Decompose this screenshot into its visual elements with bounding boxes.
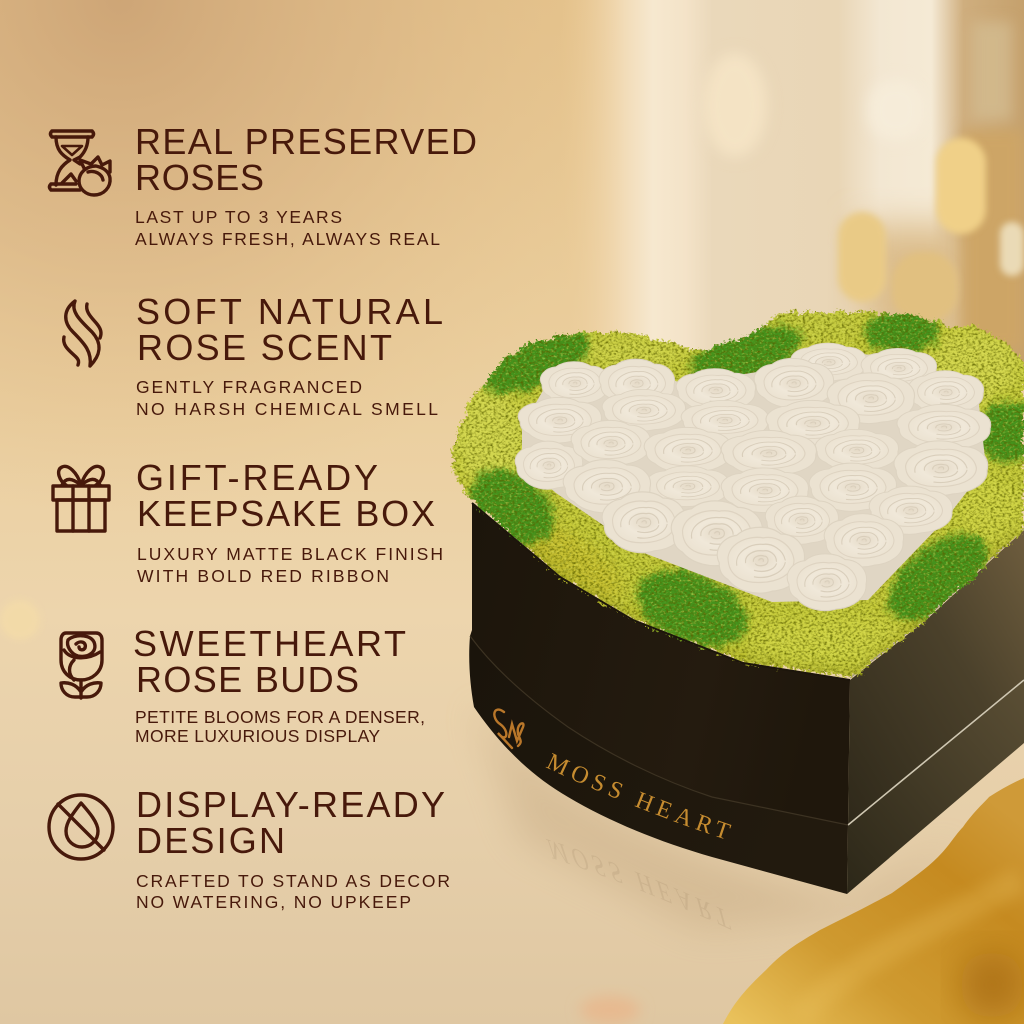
heading: SOFT NATURAL [136, 291, 443, 332]
feature: display-ready design [49, 784, 450, 912]
icon: scent wisps [64, 301, 101, 366]
feature: gift-ready keepsake box [53, 457, 443, 586]
box upper left face [470, 503, 850, 825]
description: LAST UP TO 3 YEARS [135, 207, 342, 227]
gold silk fabric [723, 778, 1024, 1024]
icon: no water drop [49, 795, 113, 859]
description [136, 871, 450, 912]
icon: rose bud [61, 633, 102, 698]
heading: DESIGN [136, 820, 285, 861]
description: LUXURY MATTE BLACK FINISH [137, 544, 443, 564]
description: WITH BOLD RED RIBBON [137, 566, 389, 586]
heading: ROSE SCENT [137, 327, 392, 368]
description [135, 207, 440, 249]
description: MORE LUXURIOUS DISPLAY [135, 726, 380, 746]
heading: DISPLAY-READY [136, 784, 445, 825]
description: CRAFTED TO STAND AS DECOR [136, 871, 450, 891]
heading: SWEETHEART [133, 623, 406, 664]
heart-shaped black box: MOSS HEART [546, 753, 732, 839]
feature: real preserved roses [50, 121, 477, 249]
feature: sweetheart rose buds [61, 623, 425, 746]
description: ALWAYS FRESH, ALWAYS REAL [135, 229, 440, 249]
icon: hourglass with rose [50, 131, 110, 195]
heading [136, 291, 443, 368]
box upper right face [848, 530, 1024, 825]
heading [136, 457, 435, 534]
heading [133, 623, 406, 700]
heading: ROSES [135, 157, 264, 198]
green moss patches [455, 311, 1024, 661]
brand monogram [494, 710, 523, 748]
brand name on lid [545, 767, 742, 845]
icon: gift box [53, 466, 109, 531]
heading: GIFT-READY [136, 457, 378, 498]
description: PETITE BLOOMS FOR A DENSER, [135, 707, 425, 727]
box lid left face [469, 636, 848, 894]
heading [135, 121, 477, 198]
moss ring [440, 300, 1024, 690]
description [136, 377, 438, 419]
heading: KEEPSAKE BOX [137, 493, 435, 534]
box reflection on table: MOSS HEART [546, 839, 731, 930]
white preserved roses heart [510, 340, 1000, 620]
heading [136, 784, 445, 861]
description [135, 707, 425, 746]
box lid right face [847, 680, 1024, 894]
heart-shaped black box [469, 504, 1024, 894]
description: GENTLY FRAGRANCED [136, 377, 362, 397]
heading: ROSE BUDS [136, 659, 359, 700]
description [137, 544, 443, 586]
feature: soft natural rose scent [64, 291, 443, 419]
description: NO HARSH CHEMICAL SMELL [136, 399, 438, 419]
description: NO WATERING, NO UPKEEP [136, 892, 411, 912]
heading: REAL PRESERVED [135, 121, 477, 162]
